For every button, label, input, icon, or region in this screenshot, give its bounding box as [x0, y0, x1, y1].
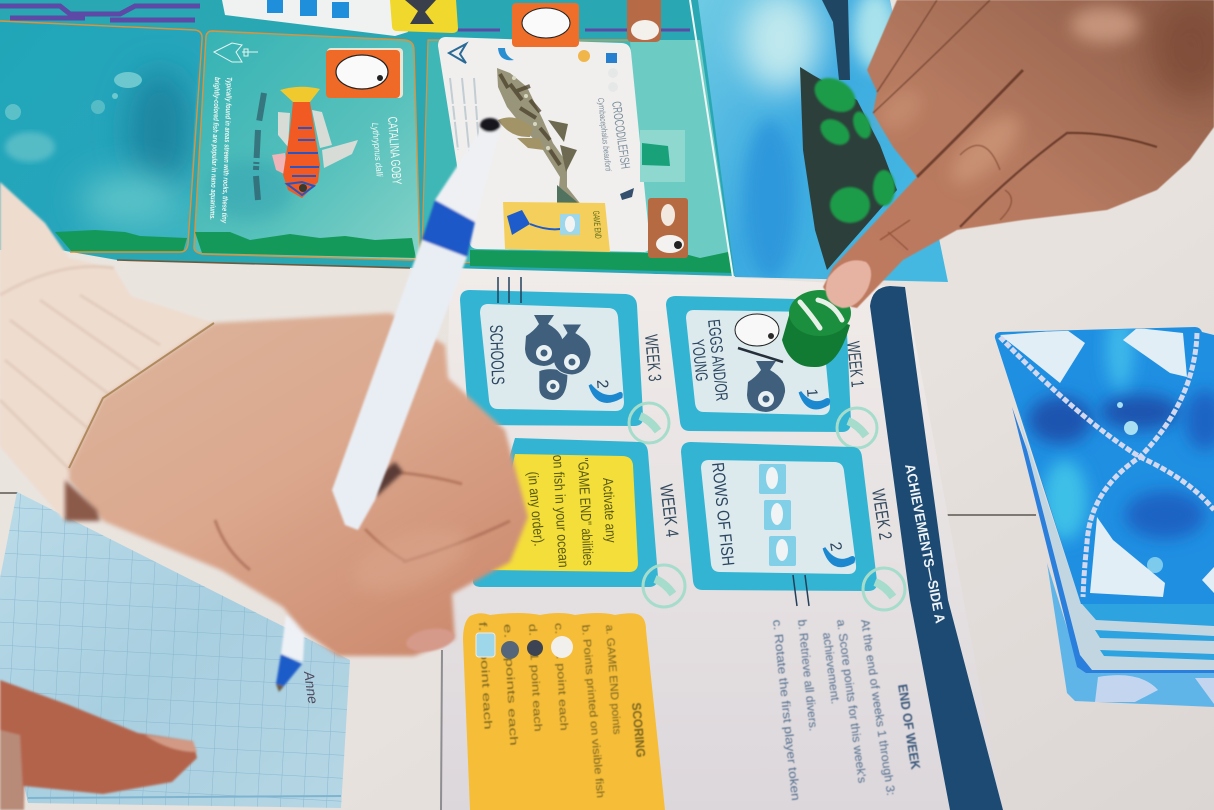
wave cost 1	[800, 388, 829, 408]
text: end of week: b. Retrieve all divers.	[795, 619, 821, 732]
icon: three fish	[525, 315, 591, 400]
deck base	[1047, 563, 1214, 707]
shadow marks	[256, 93, 264, 200]
text: week 1: WEEK 1	[843, 340, 868, 388]
text: eggs and or young	[688, 318, 731, 402]
icon: recycle badge	[837, 408, 877, 448]
top card	[995, 327, 1214, 604]
text: end of week: At the end of weeks 1 through 3:	[858, 618, 898, 796]
icon: chevron	[449, 44, 466, 63]
icon: blue crescent	[498, 48, 514, 60]
icon: recycle badge	[863, 568, 905, 610]
text: crocodilefish name: CROCODILEFISH	[609, 100, 633, 170]
pen nib end	[480, 118, 500, 132]
hand: left writing	[65, 313, 528, 656]
thumbnail	[404, 625, 456, 655]
text: Catalina goby description: brightly-colored fish are popular in nano aquariums.	[208, 77, 222, 220]
panel: week 2 rows of fish	[681, 442, 905, 610]
band: achievements header: ACHIEVEMENTS—SIDE A	[902, 463, 949, 625]
wave cost 2: 2	[593, 379, 611, 389]
fingernail	[826, 260, 871, 308]
handwriting: Anne	[301, 669, 321, 705]
icon: fin	[214, 43, 258, 62]
game end ability	[503, 202, 610, 252]
text: activate game end	[524, 454, 618, 568]
text: end of week: END OF WEEK	[895, 683, 923, 771]
text: end of week	[770, 618, 923, 801]
text: end of week: c. Rotate the first player token	[770, 619, 803, 801]
text: Catalina goby name: CATALINA GOBY	[385, 116, 405, 185]
top maze strip	[0, 6, 690, 42]
island	[800, 67, 897, 270]
panel: third board slot	[422, 0, 733, 277]
panel: week 3 schools	[460, 277, 669, 443]
text: eggs and or young: YOUNG	[688, 338, 711, 382]
fish: crocodilefish	[497, 68, 583, 208]
island picture	[698, 0, 948, 282]
game board	[0, 0, 735, 277]
text: game end points: a. GAME END points	[603, 624, 623, 735]
wave cost 2	[590, 379, 621, 401]
text: activate game end: (in any order).	[524, 471, 546, 547]
wave cost 1: 1	[803, 388, 821, 398]
text: school row: e. 4 points each	[501, 624, 519, 746]
text: Catalina goby name: Lythrypnus dalli	[370, 122, 385, 178]
icon: young fish	[747, 361, 785, 412]
helix	[1000, 333, 1214, 597]
pen cap	[435, 127, 500, 222]
text: week 3: WEEK 3	[641, 334, 665, 382]
panel: scoring	[463, 613, 665, 810]
panel: week 4 game end	[473, 438, 685, 607]
text: eggs and or young: EGGS AND/OR	[704, 318, 731, 402]
text: end of week: achievement.	[820, 632, 843, 705]
text: eggs row: c. = 1 point each	[552, 623, 570, 731]
faint card text	[450, 78, 480, 160]
text: printed points: b. Points printed on visible fish	[579, 624, 606, 799]
text: schools: SCHOOLS	[486, 324, 508, 385]
text: rows of fish: ROWS OF FISH	[708, 461, 738, 567]
panel: left ocean panel	[0, 21, 202, 252]
text: week 2: WEEK 2	[868, 487, 896, 541]
ticks	[793, 575, 809, 606]
text: crocodilefish name	[596, 97, 633, 173]
text: week 4: WEEK 4	[656, 483, 682, 538]
panel: week 1 eggs	[666, 296, 877, 448]
ticks	[498, 277, 521, 303]
achievements sheet	[441, 268, 1003, 810]
game end ability: GAME END	[591, 210, 603, 239]
text: Catalina goby name	[370, 116, 405, 185]
text: activate game end: Activate any	[599, 477, 618, 544]
pen band	[422, 200, 475, 257]
text: crocodilefish name: Cymbacephalus beauforti	[596, 97, 614, 173]
hand: bottom left	[0, 680, 197, 810]
card cost icons	[578, 50, 634, 200]
panel: Catalina goby	[194, 31, 420, 260]
wave cost 2: 2	[826, 541, 844, 553]
green token	[782, 290, 851, 367]
text: activate game end: "GAME END" abilities	[574, 457, 596, 566]
text: tiles row: f. 1 point each	[476, 622, 494, 730]
pen tip	[276, 615, 305, 692]
icon: egg	[735, 314, 779, 346]
hand: top right pointing	[823, 0, 1214, 308]
icons: scoring icons	[476, 633, 573, 659]
tokens on board	[222, 0, 688, 258]
text: activate game end: on fish in your ocean	[549, 454, 571, 568]
text: scoring title: SCORING	[629, 702, 648, 758]
card: crocodile fish	[438, 37, 650, 252]
text: end of week: a. Score points for this week's	[834, 619, 869, 784]
icon: recycle badge	[643, 565, 685, 607]
pen barrel	[332, 240, 467, 530]
pen	[332, 118, 500, 530]
band: achievements header	[870, 286, 1003, 810]
text: Catalina goby description: Typically found in areas strewn with rocks, these tiny	[220, 77, 234, 224]
notepad	[0, 492, 350, 808]
right card deck	[995, 310, 1214, 707]
text: diver row: d. = 1 point each	[526, 624, 544, 732]
icon: recycle badge	[629, 403, 669, 443]
shells	[1000, 328, 1214, 597]
sleeve	[0, 182, 214, 521]
icon: fish tiles	[759, 464, 796, 566]
post	[822, 0, 850, 80]
fish: goby	[272, 87, 358, 198]
wave cost 2	[824, 541, 854, 566]
text: Catalina goby description	[208, 77, 234, 224]
